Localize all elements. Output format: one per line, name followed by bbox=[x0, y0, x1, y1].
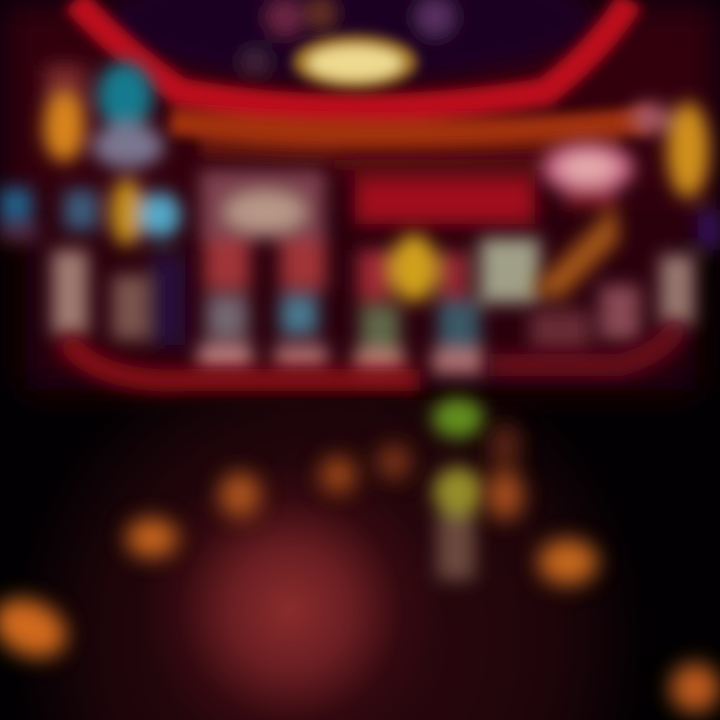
floor: orange light spots bbox=[0, 424, 720, 713]
slot machines: left bank bbox=[0, 62, 185, 345]
ceiling: dark dome bbox=[110, 0, 590, 80]
red sign panel bbox=[335, 158, 545, 224]
ceiling lamp bbox=[293, 35, 417, 89]
background: upper walls bbox=[0, 0, 720, 390]
slot machines: right bank bbox=[530, 102, 720, 350]
slot machines: centre bank bbox=[198, 170, 540, 374]
ceiling: red arch bbox=[75, 0, 650, 154]
floor: reflected red glow bbox=[10, 400, 700, 720]
machine base: red counter bbox=[65, 325, 680, 380]
floor: light reflections bbox=[432, 398, 484, 580]
